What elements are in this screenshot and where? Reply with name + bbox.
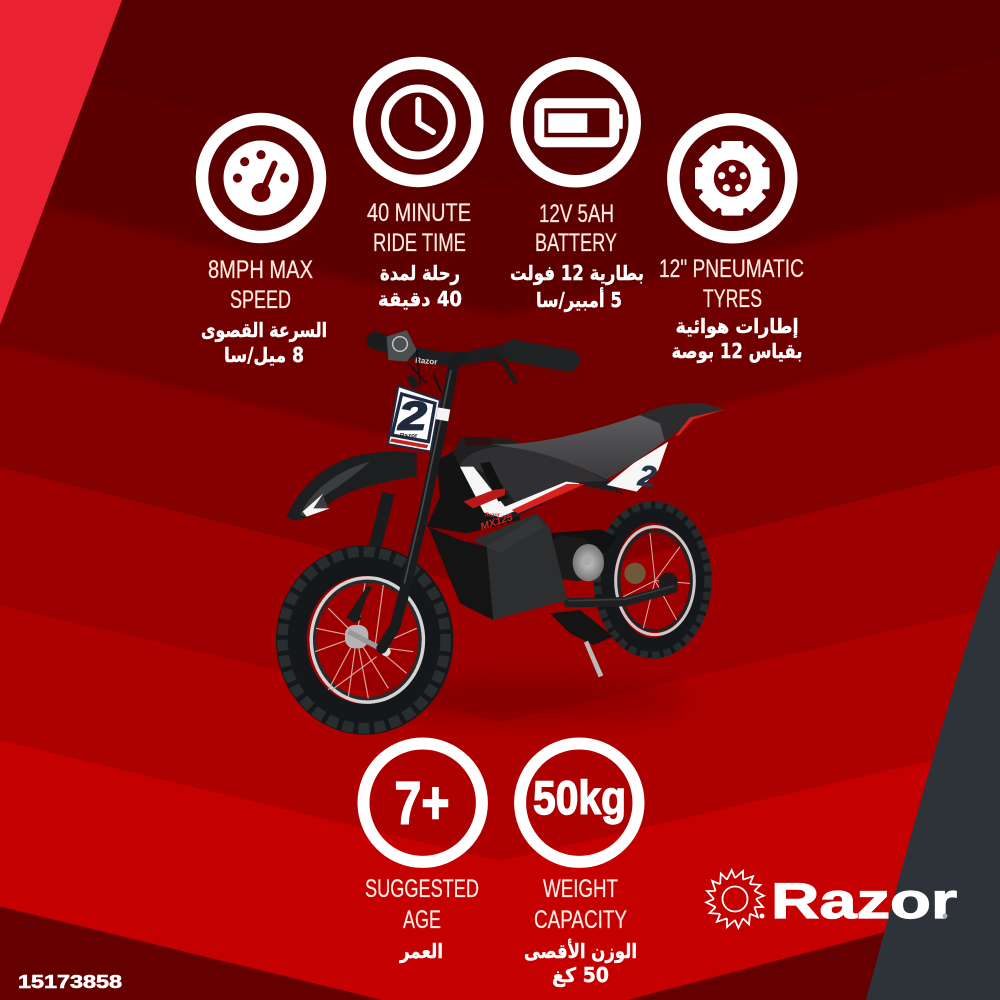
feature: max speed bbox=[201, 119, 327, 367]
label: 40 minute ride time: RIDE TIME bbox=[373, 229, 466, 257]
label: 12v 5ah battery: 5 أمبير/سا bbox=[536, 286, 622, 312]
frame bbox=[427, 447, 520, 533]
white rear side panel: 2 bbox=[636, 460, 658, 494]
label: weight capacity: الوزن الأقصى bbox=[524, 938, 637, 963]
label: 40 minute ride time: 40 دقيقة bbox=[378, 287, 462, 311]
rear fork leg bbox=[350, 587, 370, 620]
fork rear tube bbox=[375, 493, 388, 547]
label: 12 inch pneumatic tyres: TYRES bbox=[703, 285, 762, 313]
feature: tyres bbox=[659, 119, 804, 363]
front fork bbox=[382, 367, 453, 648]
label: 12 inch pneumatic tyres: بقياس 12 بوصة bbox=[672, 339, 802, 363]
icon: tyre bbox=[673, 119, 791, 237]
model text: MX125 bbox=[479, 512, 515, 533]
label: weight capacity: WEIGHT bbox=[543, 875, 618, 903]
product code: 15173858 bbox=[18, 972, 122, 992]
icon: speedometer bbox=[202, 119, 320, 237]
label: suggested age: SUGGESTED bbox=[365, 875, 479, 903]
label: 8mph max speed: 8 ميل/سا bbox=[224, 343, 304, 367]
label: 40 minute ride time: رحلة لمدة bbox=[380, 261, 460, 285]
label: weight capacity: 50 كغ bbox=[552, 963, 609, 987]
label: suggested age: العمر bbox=[399, 939, 443, 963]
label: weight capacity bbox=[524, 875, 637, 987]
icon: clock bbox=[359, 63, 477, 181]
kickstand bbox=[584, 641, 603, 677]
handlebar: Razor bbox=[415, 356, 438, 367]
label: 8mph max speed: 8MPH MAX bbox=[208, 256, 313, 284]
label: 12v 5ah battery: بطارية 12 فولت bbox=[510, 261, 644, 285]
product: electric dirt bike bbox=[282, 330, 725, 728]
motor bbox=[547, 534, 604, 583]
number plate: Razor bbox=[400, 432, 418, 439]
ground shadow bbox=[370, 680, 690, 720]
label: 12v 5ah battery: 12V 5AH bbox=[539, 200, 614, 228]
white side stripe bbox=[460, 467, 580, 517]
body fairing: Razor bbox=[485, 513, 501, 519]
label: 12v 5ah battery: BATTERY bbox=[535, 229, 617, 257]
label: weight capacity: CAPACITY bbox=[534, 906, 627, 934]
label: 8mph max speed: السرعة القصوى bbox=[201, 318, 327, 342]
red stripe bbox=[512, 484, 585, 513]
label: 40 minute ride time: 40 MINUTE bbox=[367, 199, 471, 227]
number plate: 2 bbox=[397, 394, 427, 438]
logo: razor bbox=[706, 870, 957, 929]
label: 12 inch pneumatic tyres: 12" PNEUMATIC bbox=[659, 255, 804, 283]
label: suggested age bbox=[365, 875, 479, 963]
label: 12 inch pneumatic tyres: إطارات هوائية bbox=[676, 314, 798, 338]
rear frame bbox=[547, 529, 673, 645]
right grip bbox=[513, 351, 568, 361]
badge: 7+ bbox=[364, 744, 482, 862]
badge: 7+: 7+ bbox=[394, 770, 450, 836]
badge: 50kg bbox=[520, 744, 638, 862]
badge: 50kg: 50kg bbox=[533, 771, 626, 824]
label: 12 inch pneumatic tyres bbox=[659, 255, 804, 363]
label: 8mph max speed: SPEED bbox=[230, 286, 291, 314]
right lever bbox=[487, 353, 515, 382]
feature: ride time bbox=[359, 63, 477, 311]
feature: battery bbox=[510, 63, 644, 312]
left bright red corner bbox=[0, 0, 122, 325]
icon: saw blade bbox=[706, 870, 764, 928]
seat bbox=[463, 403, 725, 479]
right dark grey corner bbox=[866, 547, 1000, 1000]
front fender bbox=[287, 452, 417, 521]
label: 40 minute ride time bbox=[367, 199, 471, 311]
label: suggested age: AGE bbox=[403, 906, 441, 934]
body fairing bbox=[453, 438, 623, 533]
wordmark: Razor bbox=[771, 873, 957, 929]
front wheel bbox=[282, 552, 446, 728]
feature: suggested age bbox=[364, 744, 482, 963]
rear wheel bbox=[597, 505, 708, 655]
icon: battery bbox=[517, 63, 635, 181]
battery box bbox=[428, 513, 567, 620]
white rear side panel bbox=[607, 442, 668, 494]
label: 8mph max speed bbox=[201, 256, 327, 367]
feature: weight capacity bbox=[520, 744, 638, 987]
left grip and throttle bbox=[375, 341, 387, 344]
handlebar bbox=[375, 330, 568, 393]
number plate bbox=[388, 386, 450, 452]
label: 12v 5ah battery bbox=[510, 200, 644, 312]
